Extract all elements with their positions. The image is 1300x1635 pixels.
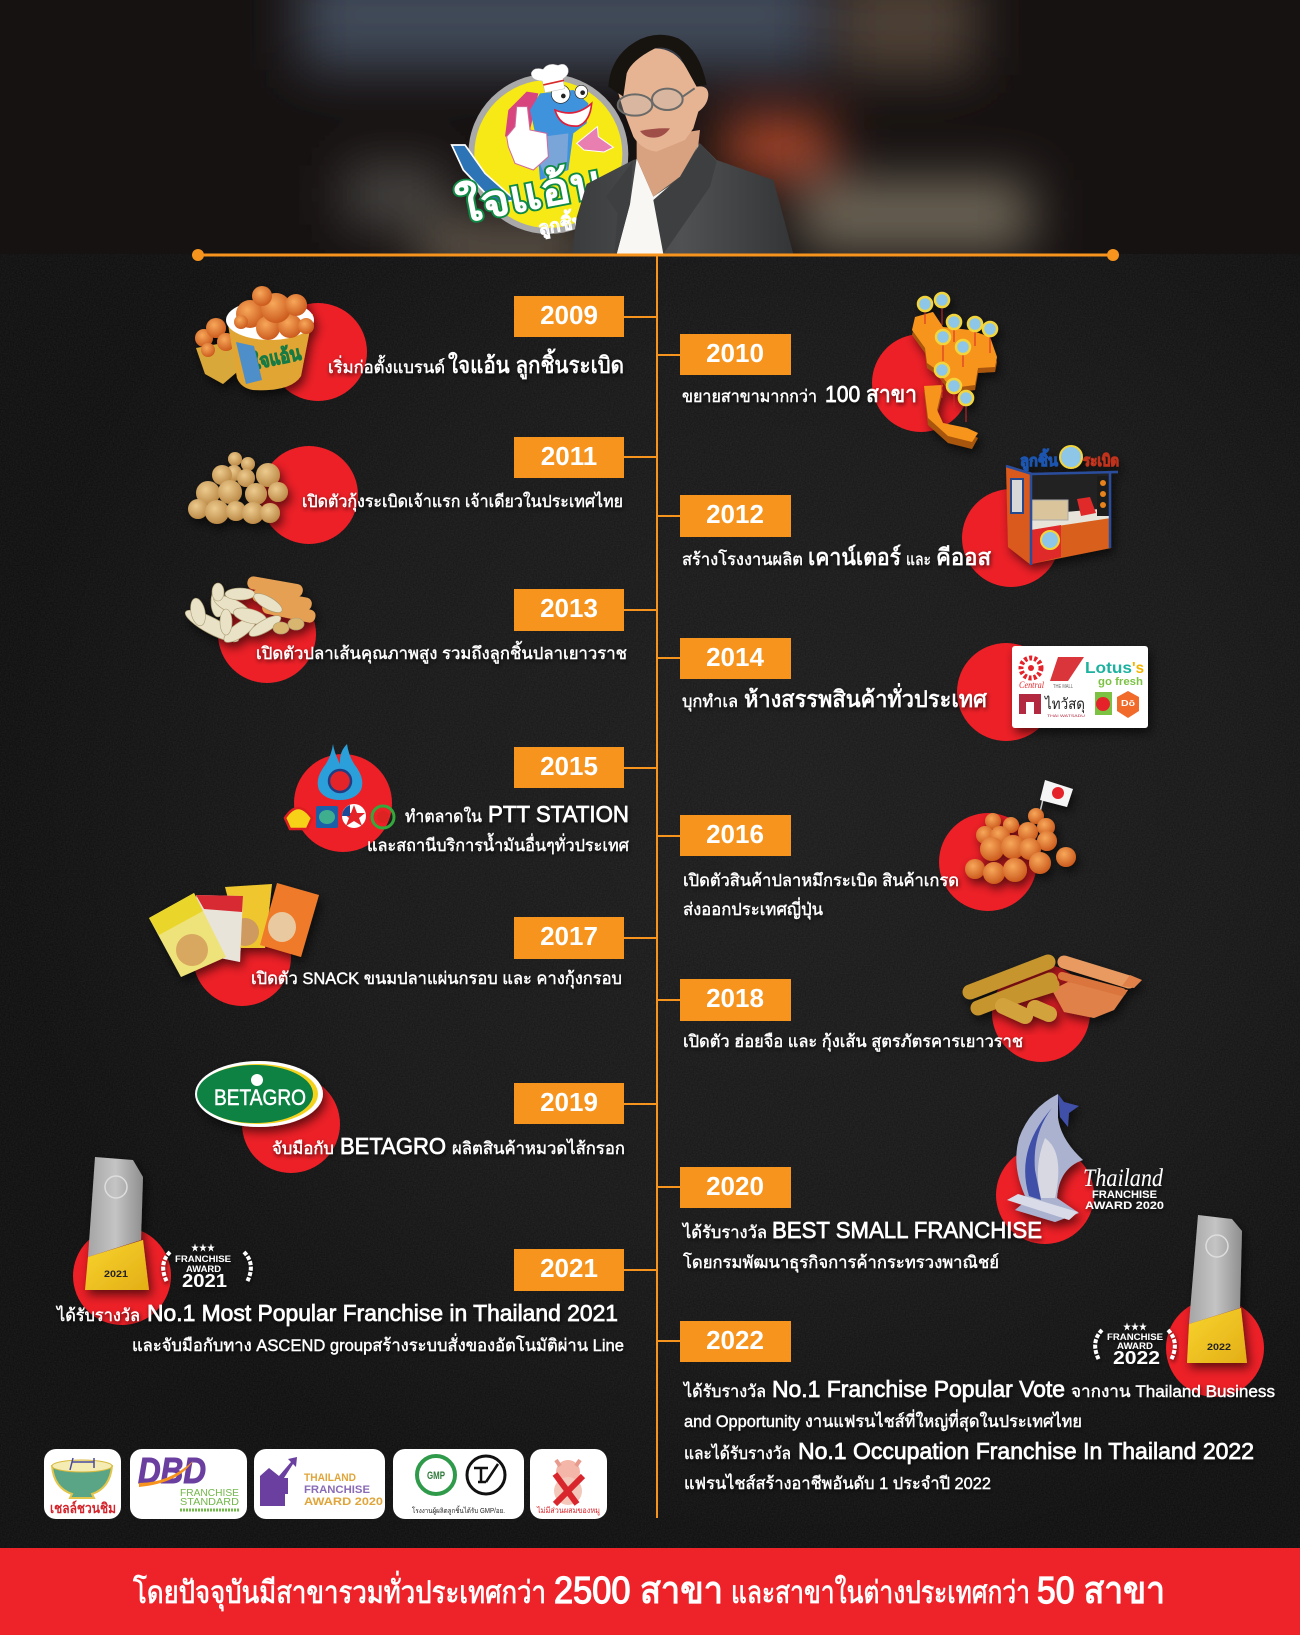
kiosk sign: ลูกชิ้น [1020,448,1058,472]
text: ได้รับรางวัล [682,1381,766,1401]
year tag 2017: 2017 [540,921,598,951]
logo: Do Home: Dō [1121,699,1135,708]
text [682,1376,1275,1493]
logo: Lotus's: 's [1132,660,1144,677]
milestone 2015 [285,744,657,855]
year tag 2020: 2020 [706,1171,764,1201]
text [367,801,629,855]
timeline axis [192,249,1119,1518]
year tag 2022 [657,1321,791,1362]
award badge 2021 [163,1243,251,1291]
badge: GMP and food safety [393,1449,524,1519]
text: เริ่มก่อตั้งแบรนด์ [328,355,445,377]
milestone 2021 [55,1157,657,1355]
milestone 2016 [657,780,1076,920]
footer text: 2500 สาขา [554,1570,723,1612]
award badge 2021: AWARD [186,1264,221,1275]
year tag 2013: 2013 [540,593,598,623]
image: fried shrimp balls [188,452,288,524]
milestone 2020 [657,1094,1164,1273]
footer text: โดยปัจจุบันมีสาขารวมทั่วประเทศกว่า [133,1571,546,1612]
award badge 2022: 2022 [1113,1348,1160,1368]
logo: Caltex [342,804,366,828]
year tag 2010: 2010 [706,338,764,368]
badge: DBD Franchise Standard: DBD [138,1450,206,1491]
kiosk sign: ระเบิด [1083,452,1119,470]
year tag 2011 [514,437,657,478]
badge: DBD Franchise Standard [130,1449,247,1519]
year tag 2019: 2019 [540,1087,598,1117]
award badge 2022: ★★★ [1123,1322,1147,1332]
year tag 2012 [657,495,791,537]
award badge 2021: FRANCHISE [175,1254,231,1265]
text: และจับมือกับทาง ASCEND groupสร้างระบบสั่งของอัตโนมัติผ่าน Line [132,1333,624,1355]
logo: Thai Watsadu [1019,694,1085,718]
text: ได้รับรางวัล [55,1305,140,1325]
portrait of the founder [572,35,793,254]
image: gold trophy 2021 [85,1157,149,1290]
image: Thailand map with pins [912,293,997,449]
logo: Big C [1095,692,1112,715]
text: เปิดตัวปลาเส้นคุณภาพสูง รวมถึงลูกชิ้นปลาเยาวราช [256,641,627,664]
badge: Thailand Franchise Award 2020: FRANCHISE [304,1484,370,1496]
badge: no pork [530,1449,607,1519]
award badge 2022: FRANCHISE [1107,1332,1163,1343]
image: gold trophy 2022: 2022 [1207,1342,1231,1352]
year tag 2021: 2021 [540,1253,598,1283]
mouth [640,128,670,138]
text: BEST SMALL FRANCHISE [772,1217,1042,1243]
logo: Thai Watsadu: ไทวัสดุ [1044,695,1085,714]
text: จากงาน Thailand Business [1071,1382,1275,1401]
logo wordmark: ใจแอ้น [452,154,608,233]
award wordmark: AWARD 2020 [1085,1200,1164,1212]
year tag 2019 [514,1083,657,1124]
year tag 2022: 2022 [706,1325,764,1355]
footer banner [0,1548,1300,1635]
year tag 2012: 2012 [706,499,764,529]
suit jacket [572,143,793,254]
logo: Bangchak [316,806,338,828]
image: franchise kiosk [1006,446,1119,565]
footer text [133,1570,1165,1612]
award badge 2021: 2021 [182,1271,227,1291]
image: snack bags [149,883,319,977]
text: เคาน์เตอร์ [808,544,901,570]
year tag 2011: 2011 [541,441,597,471]
retail partner logo card [1012,646,1148,728]
image: squid balls with Japan flag [965,780,1076,884]
logo: The Mall: THE MALL [1053,684,1073,690]
text [328,349,624,379]
milestone 2013 [182,575,657,683]
text: 100 สาขา [825,381,917,407]
award badge 2022 [1095,1322,1175,1368]
text: PTT STATION [488,801,629,827]
text: และได้รับรางวัล [684,1443,791,1463]
text: เปิดตัว ฮ่อยจือ และ กุ้งเส้น สูตรภัตรคารเยาวราช [683,1032,1023,1052]
logo: Lotus's [1085,660,1144,688]
year tag 2015 [514,747,657,788]
text [682,381,917,407]
award wordmark [1083,1165,1164,1212]
badge: DBD Franchise Standard: FRANCHISE [180,1487,239,1499]
year tag 2021 [514,1249,657,1291]
brand logo: Jai Aen: ลูกชิ้น [536,207,587,241]
year tag 2018: 2018 [706,983,764,1013]
text [55,1300,624,1355]
milestone 2022 [657,1215,1275,1493]
icon: Japan flag [1040,780,1073,807]
year tag 2020 [657,1167,791,1208]
text [272,1133,625,1159]
text: ขยายสาขามากกว่า [682,387,817,406]
year tag 2009: 2009 [540,300,598,330]
logo: Betagro [195,1061,323,1127]
image: snack buckets [195,286,314,390]
badge: Thailand Franchise Award 2020: AWARD 2020 [304,1496,383,1508]
text: และสถานีบริการน้ำมันอื่นๆทั่วประเทศ [367,833,629,855]
year tag 2009 [514,296,657,337]
text: ส่งออกประเทศญี่ปุ่น [683,897,823,920]
text: ผลิตสินค้าหมวดไส้กรอก [452,1138,625,1158]
year tag 2014 [657,638,791,679]
text: ห้างสรรพสินค้าทั่วประเทศ [744,683,987,712]
icon: fish tail [452,145,515,203]
image: crystal trophy [1007,1094,1083,1222]
logo: Thai Watsadu: THAI WATSADU [1047,713,1085,718]
logo: Lotus's: go fresh [1098,676,1143,688]
year tag 2013 [514,589,657,631]
text: ใจแอ้น ลูกชิ้นระเบิด [448,349,624,379]
badge: Thailand Franchise Award 2020 [254,1449,385,1519]
award wordmark: Thailand [1083,1165,1163,1192]
text: เปิดตัวสินค้าปลาหมึกระเบิด สินค้าเกรด [683,871,959,890]
image: gold trophy 2021: 2021 [104,1269,128,1279]
footer text: 50 สาขา [1037,1570,1165,1612]
text [683,871,959,920]
text: No.1 Occupation Franchise In Thailand 2022 [798,1438,1254,1464]
year tag 2014: 2014 [706,642,764,672]
text [682,544,991,570]
badge: GMP and food safety: โรงงานผู้ผลิตลูกชิ้นได้รับ GMP/อย. [412,1504,505,1515]
logo: Shell [285,808,312,829]
badge: Shell Chuan Chim [44,1449,121,1519]
icon: fish mascot [505,85,613,180]
award wordmark: FRANCHISE [1092,1189,1157,1201]
text: แฟรนไชส์สร้างอาชีพอันดับ 1 ประจำปี 2022 [684,1473,991,1493]
text: No.1 Most Popular Franchise in Thailand 2021 [147,1300,618,1326]
year tag 2017 [514,917,657,959]
award badge 2022: AWARD [1117,1341,1153,1352]
lapels [653,143,717,254]
logo: Central: Central [1019,680,1044,690]
image: fish strips and rolls [182,575,317,647]
kiosk sign [1020,446,1119,472]
image: snack buckets: ใจแอ้น [249,341,303,375]
milestone 2017 [149,883,657,1006]
logo: PT [372,806,394,828]
logo: Betagro: BETAGRO [214,1085,306,1110]
text: BETAGRO [340,1133,446,1159]
text: No.1 Franchise Popular Vote [772,1376,1065,1402]
text: โดยกรมพัฒนาธุรกิจการค้ากระทรวงพาณิชย์ [683,1252,999,1273]
white shirt [617,145,700,254]
text [681,1217,1042,1273]
badge: DBD Franchise Standard: STANDARD [180,1496,239,1508]
header blurred photo background [0,0,1300,278]
text: เปิดตัวกุ้งระเบิดเจ้าแรก เจ้าเดียวในประเทศไทย [302,491,623,512]
badge: GMP and food safety: GMP [427,1470,445,1482]
neck [637,130,700,197]
logo: Lotus's: Lotus [1085,660,1132,677]
text: และ [906,550,931,569]
text: จับมือกับ [272,1139,334,1158]
milestone 2019 [195,1061,657,1173]
face [618,48,708,152]
hair [608,35,707,97]
milestone 2010 [657,293,997,449]
milestone 2018 [657,962,1142,1062]
text [682,683,987,712]
axis endpoint [1107,249,1119,261]
milestone 2014 [657,638,1148,741]
text: คีออส [936,544,991,570]
footer text: และสาขาในต่างประเทศกว่า [731,1575,1030,1610]
year tag 2010 [657,334,791,375]
glasses [618,88,695,116]
year tag 2016 [657,815,791,856]
text: สร้างโรงงานผลิต [682,549,803,569]
text: ได้รับรางวัล [681,1222,767,1242]
text: เปิดตัว SNACK ขนมปลาแผ่นกรอบ และ คางกุ้งกรอบ [251,969,622,989]
text: ทำตลาดใน [405,806,482,826]
image: fish rolls [970,962,1142,1018]
milestone 2009 [195,286,657,401]
badge: Thailand Franchise Award 2020: THAILAND [304,1472,356,1484]
badge: Shell Chuan Chim: เชลล์ชวนชิม [50,1500,116,1516]
badge: no pork: ไม่มีส่วนผสมของหมู [536,1506,600,1516]
year tag 2016: 2016 [706,819,764,849]
milestone 2011 [188,437,657,544]
award badge 2021: ★★★ [191,1243,215,1253]
text: บุกทำเล [682,692,738,712]
icon: chef hat [531,64,568,93]
text: and Opportunity งานแฟรนไชส์ที่ใหญ่ที่สุดในประเทศไทย [684,1409,1082,1432]
logo: PTT flame [318,744,362,800]
brand logo: Jai Aen [452,64,628,241]
certification badges [44,1449,607,1519]
milestone 2012 [657,446,1119,587]
year tag 2015: 2015 [540,751,598,781]
axis endpoint [192,249,204,261]
image: gold trophy 2022 [1187,1215,1247,1363]
year tag 2018 [657,979,791,1021]
